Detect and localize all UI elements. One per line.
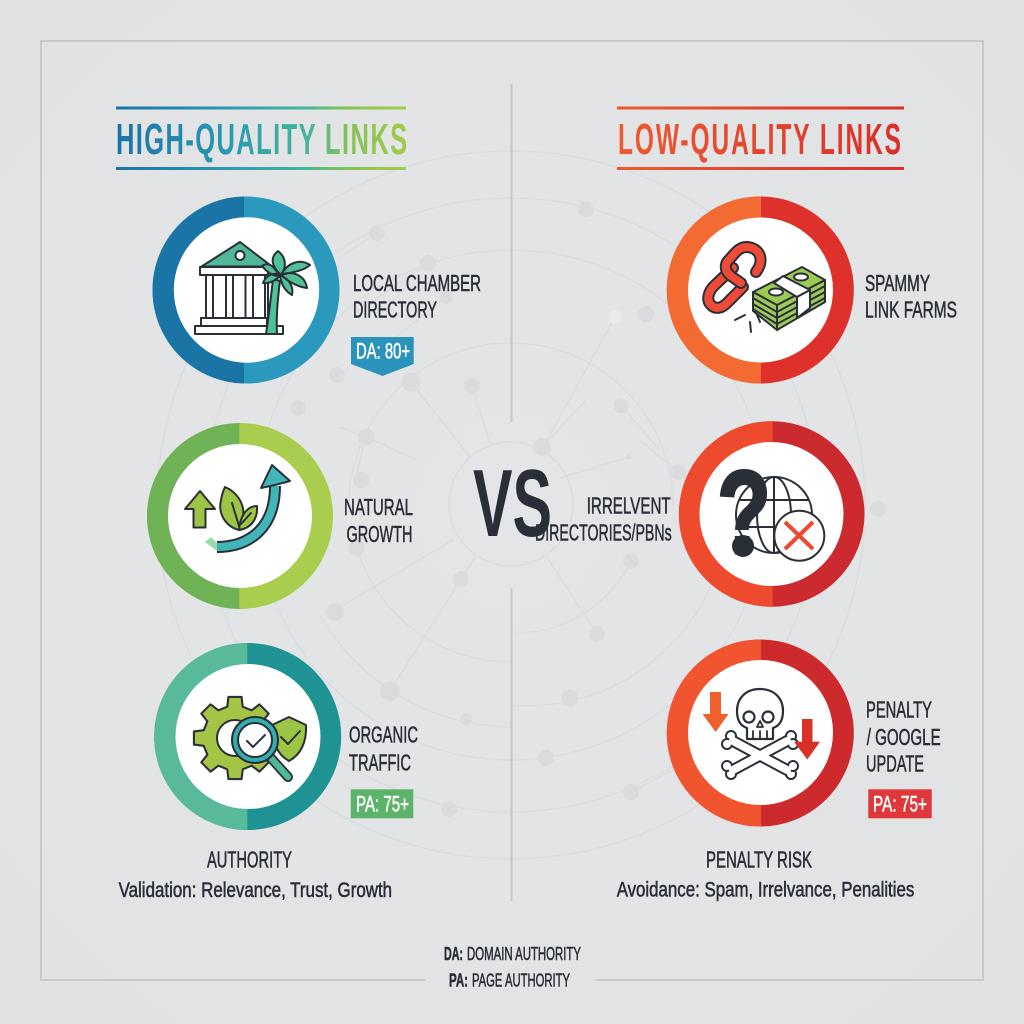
- caption: penalty risk: Avoidance: Spam, Irrelvance, Penalities: [617, 879, 914, 902]
- label: spammy link farms: [865, 270, 957, 323]
- heading: high-quality links: HIGH-QUALITY LINKS: [116, 114, 407, 164]
- icon: question mark: ?: [717, 447, 771, 579]
- ring: local chamber directory: [152, 196, 340, 384]
- icon: skull and crossbones: [722, 689, 798, 779]
- icon: bank and palm: [195, 242, 310, 334]
- label: penalty google update: UPDATE: [866, 751, 924, 777]
- icon: broken chain: [708, 247, 761, 332]
- legend: [444, 944, 581, 991]
- label: natural growth: [344, 494, 413, 547]
- icon: down arrow red: [794, 719, 820, 760]
- label: penalty google update: PENALTY: [866, 697, 932, 723]
- label: natural growth: GROWTH: [346, 521, 412, 547]
- label: penalty google update: / GOOGLE: [867, 724, 941, 750]
- icon: down arrow orange: [702, 692, 728, 732]
- caption: authority: [119, 847, 392, 902]
- vs label: VS: [473, 450, 552, 557]
- label: local chamber directory: LOCAL CHAMBER: [353, 270, 481, 296]
- caption: authority: AUTHORITY: [207, 847, 292, 873]
- caption: penalty risk: [617, 846, 914, 902]
- badge: PA 75+ green: [351, 789, 413, 818]
- ring: penalty: [667, 640, 854, 826]
- icon: gear, shield and magnifier: [194, 697, 306, 779]
- caption: penalty risk: PENALTY RISK: [706, 846, 812, 872]
- label: irrelevent directories: DIRECTORIES/PBNs: [535, 520, 672, 546]
- icon: globe with cross: [736, 477, 824, 561]
- label: organic traffic: TRAFFIC: [349, 750, 411, 776]
- label: spammy link farms: LINK FARMS: [865, 297, 957, 323]
- label: natural growth: NATURAL: [344, 494, 413, 520]
- label: organic traffic: ORGANIC: [349, 722, 418, 748]
- label: local chamber directory: [353, 270, 481, 323]
- badge: DA 80+: [351, 337, 414, 376]
- label: irrelevent directories: [535, 492, 672, 546]
- label: penalty google update: [866, 697, 941, 777]
- badge: PA 75+ red: PA: 75+: [873, 792, 927, 817]
- legend: DA:: [444, 944, 463, 964]
- badge: DA 80+: DA: 80+: [356, 338, 410, 363]
- badge: PA 75+ green: PA: 75+: [356, 792, 409, 817]
- label: local chamber directory: DIRECTORY: [353, 297, 437, 323]
- legend: PA:: [449, 971, 468, 991]
- label: irrelevent directories: IRRELVENT: [587, 492, 671, 518]
- legend: PAGE AUTHORITY: [472, 971, 570, 991]
- caption: authority: Validation: Relevance, Trust, Growth: [119, 879, 392, 902]
- heading: low-quality links: LOW-QUALITY LINKS: [618, 114, 901, 164]
- legend: DOMAIN AUTHORITY: [467, 944, 581, 964]
- ring: natural growth: [147, 423, 333, 609]
- label: spammy link farms: SPAMMY: [865, 270, 930, 296]
- label: organic traffic: [349, 722, 418, 776]
- ring: spammy link farms: [667, 196, 854, 384]
- ring: irrelevant directories: [679, 421, 864, 607]
- badge: PA 75+ red: [868, 789, 932, 818]
- icon: growth arrows and leaves: [185, 465, 290, 551]
- ring: organic traffic: [154, 643, 341, 830]
- icon: cash stack: [753, 267, 825, 330]
